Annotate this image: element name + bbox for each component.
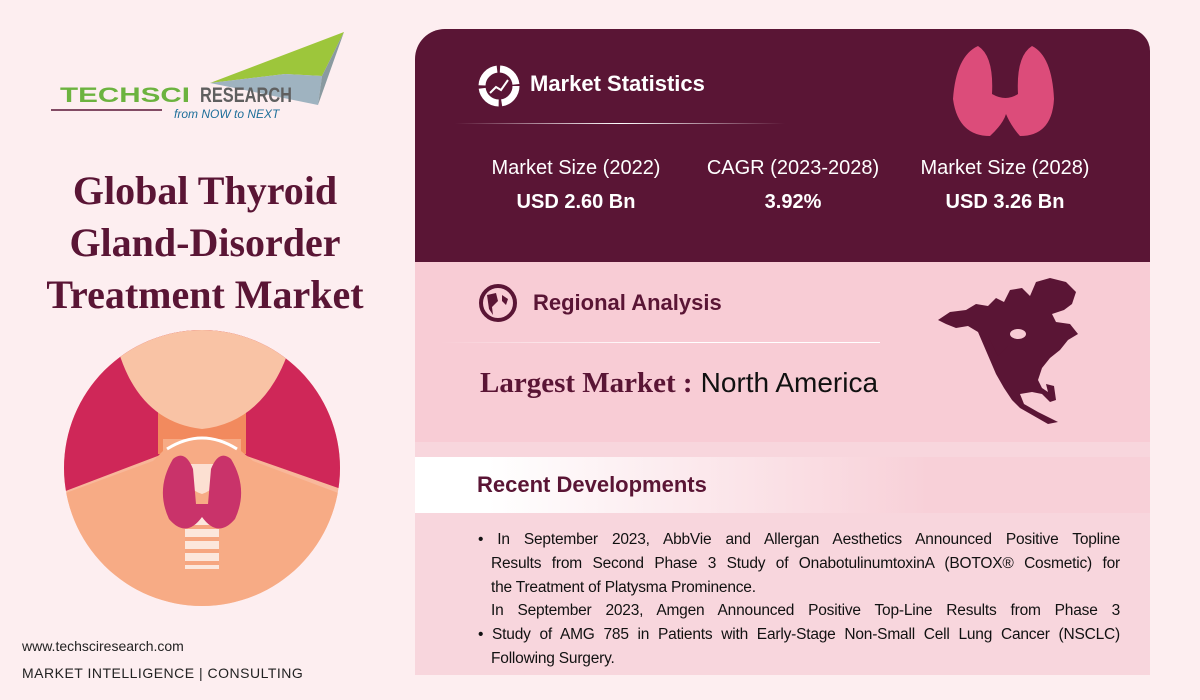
stat 1 (492, 157, 660, 213)
stat 1: Market Size (2022) (492, 157, 660, 179)
recent developments text: Results from Second Phase 3 Study of OnabotulinumtoxinA (BOTOX® Cosmetic) for (491, 555, 1120, 572)
stat 2: CAGR (2023-2028) (707, 157, 879, 179)
stat 3: USD 3.26 Bn (946, 191, 1064, 213)
recent developments text: • In September 2023, AbbVie and Allergan Aesthetics Announced Positive Topline (478, 531, 1120, 548)
recent developments text: In September 2023, Amgen Announced Positive Top-Line Results from Phase 3 (491, 602, 1120, 619)
panel: regional analysis (415, 262, 1150, 442)
footer: tagline: MARKET INTELLIGENCE | CONSULTING (22, 665, 303, 681)
title: Global Thyroid (73, 168, 337, 213)
logo: TECHSCI (60, 84, 190, 107)
logo (51, 32, 344, 121)
stat 2: 3.92% (765, 191, 821, 213)
thyroid image (953, 46, 1054, 136)
icon: globe (479, 284, 517, 322)
stat 2 (707, 157, 879, 213)
panel: market statistics (415, 29, 1150, 262)
recent developments text: the Treatment of Platysma Prominence. (491, 579, 756, 596)
title: Gland-Disorder (69, 220, 341, 265)
heading band: recent developments: Recent Developments (477, 472, 707, 497)
recent developments text: • Study of AMG 785 in Patients with Early-Stage Non-Small Cell Lung Cancer (NSCLC) (478, 626, 1120, 643)
logo: RESEARCH (200, 84, 292, 107)
recent developments text (478, 531, 1120, 667)
heading band: recent developments (415, 457, 1150, 513)
heading: Regional Analysis (533, 290, 722, 315)
stat 3: Market Size (2028) (921, 157, 1089, 179)
illustration: thyroid neck (64, 330, 340, 606)
footer: website: www.techsciresearch.com (22, 638, 184, 654)
logo: from NOW to NEXT (174, 107, 281, 121)
stat 1: USD 2.60 Bn (517, 191, 635, 213)
recent developments text: Following Surgery. (491, 650, 615, 667)
icon: logo swoosh (210, 32, 344, 105)
stat 3 (921, 157, 1089, 213)
title (46, 168, 364, 317)
title: Treatment Market (46, 272, 364, 317)
icon: north america map (938, 278, 1078, 424)
icon: stats (478, 66, 520, 106)
heading: Market Statistics (530, 71, 705, 96)
largest market: Largest Market : North America (480, 367, 878, 399)
